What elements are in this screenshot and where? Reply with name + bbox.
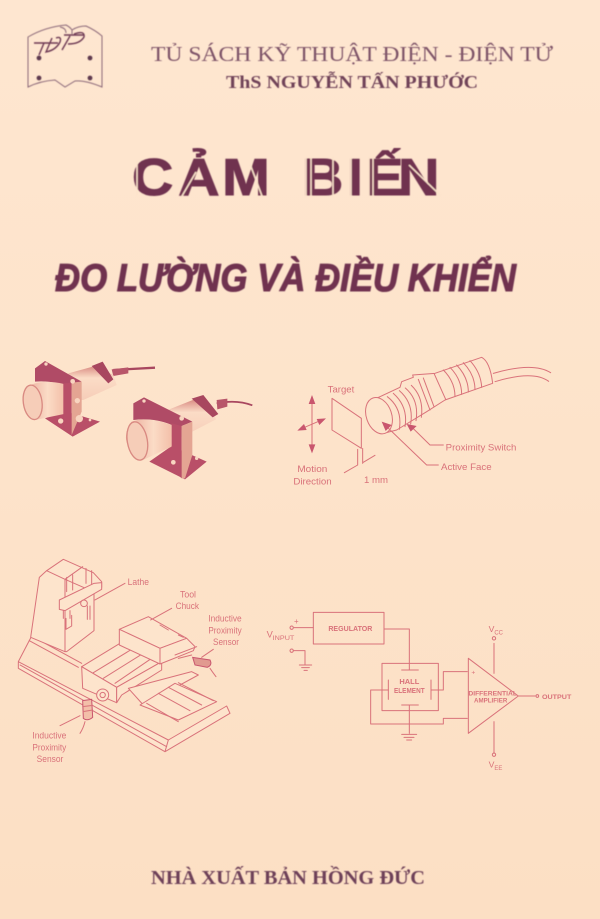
label: 1 mm: 1 mm [364, 475, 388, 485]
leader: active face [385, 425, 438, 465]
leader: tool chuck [151, 608, 172, 620]
diagram: target and proximity switch [293, 357, 551, 487]
leader: right sensor [202, 649, 213, 657]
label: inductive proximity sensor right: Proximity [208, 625, 242, 635]
label: regulator: REGULATOR [328, 626, 372, 633]
label: differential amplifier [468, 691, 517, 705]
gap dimension marker [344, 448, 375, 473]
label: active face: Active Face [441, 462, 492, 472]
title: Cảm biến: CẢM BIẾN [132, 147, 440, 206]
author name: ThS NGUYỄN TẤN PHƯỚC [226, 72, 478, 92]
illustration: two proximity sensors with brackets [21, 361, 252, 479]
label: Vee: V [489, 760, 495, 770]
label: Vcc [489, 624, 504, 636]
ground symbols [299, 665, 417, 740]
sensor one [21, 361, 155, 437]
label: chuck: Chuck [176, 601, 199, 611]
label: Vee [489, 760, 502, 772]
label: inductive proximity sensor left: Sensor [37, 754, 63, 764]
Hall element plates [388, 670, 431, 705]
leader: proximity switch [411, 426, 443, 445]
icon: publisher book logo [28, 25, 102, 87]
label: proximity switch: Proximity Switch [446, 443, 516, 453]
lower slide [128, 672, 217, 722]
regulator box [313, 612, 384, 644]
label: inductive proximity sensor left: Inductive [32, 731, 66, 741]
label: inductive proximity sensor right [208, 614, 242, 647]
machine base [18, 636, 230, 752]
label: V input: + [294, 617, 299, 626]
heading: book series: TỦ SÁCH KỸ THUẬT ĐIỆN - ĐIỆN TỬ [151, 42, 553, 66]
motion direction arrows [297, 395, 326, 453]
label: Vee: EE [494, 766, 502, 772]
label: Hall element [394, 679, 425, 695]
sliding table [82, 643, 162, 703]
label: output: OUTPUT [542, 694, 571, 701]
label: Vcc: CC [494, 630, 504, 636]
leader arrowhead: active face [382, 422, 392, 431]
label: inductive proximity sensor left [32, 731, 67, 764]
diagram: Hall element circuit [267, 612, 571, 772]
label: target: Target [328, 384, 355, 394]
diagram: lathe with inductive sensors [18, 559, 242, 764]
sensor two [124, 395, 252, 479]
subtitle: Đo lường và điều khiển: ĐO LƯỜNG VÀ ĐIỀU KHIỂN [55, 255, 517, 300]
label: Hall element: ELEMENT [394, 688, 425, 695]
label: differential amplifier: AMPLIFIER [474, 699, 508, 705]
label: inductive proximity sensor right: Sensor [213, 637, 239, 647]
label: direction: Direction [293, 477, 332, 487]
leader arrowhead: proximity switch [407, 424, 417, 432]
tool chuck block [119, 617, 195, 664]
label: inductive proximity sensor left: Proximity [32, 742, 67, 752]
proximity switch body [361, 357, 551, 437]
label: inductive proximity sensor right: Inductive [208, 614, 242, 624]
label: tool: Tool [180, 590, 196, 600]
terminals [290, 626, 539, 756]
target plate [332, 398, 361, 448]
label: Hall element: HALL [399, 679, 420, 686]
publisher name: NHÀ XUẤT BẢN HỒNG ĐỨC [151, 867, 425, 889]
sensor on chuck [175, 647, 216, 677]
label: V input: INPUT [273, 635, 294, 642]
label: differential amplifier: DIFFERENTIAL [468, 691, 517, 697]
sensor on base [80, 699, 93, 733]
column and head [31, 559, 102, 652]
label: V input [267, 617, 299, 642]
label: motion direction: Motion [297, 464, 327, 474]
leader: lathe [95, 583, 125, 600]
amplifier triangle [468, 658, 518, 733]
label: V input: V [267, 629, 274, 639]
label: lathe: Lathe [128, 577, 149, 587]
amplifier inputs: + [471, 669, 475, 676]
wiring [293, 628, 535, 753]
label: Vcc: V [489, 624, 495, 634]
leader: left sensor [60, 716, 80, 726]
